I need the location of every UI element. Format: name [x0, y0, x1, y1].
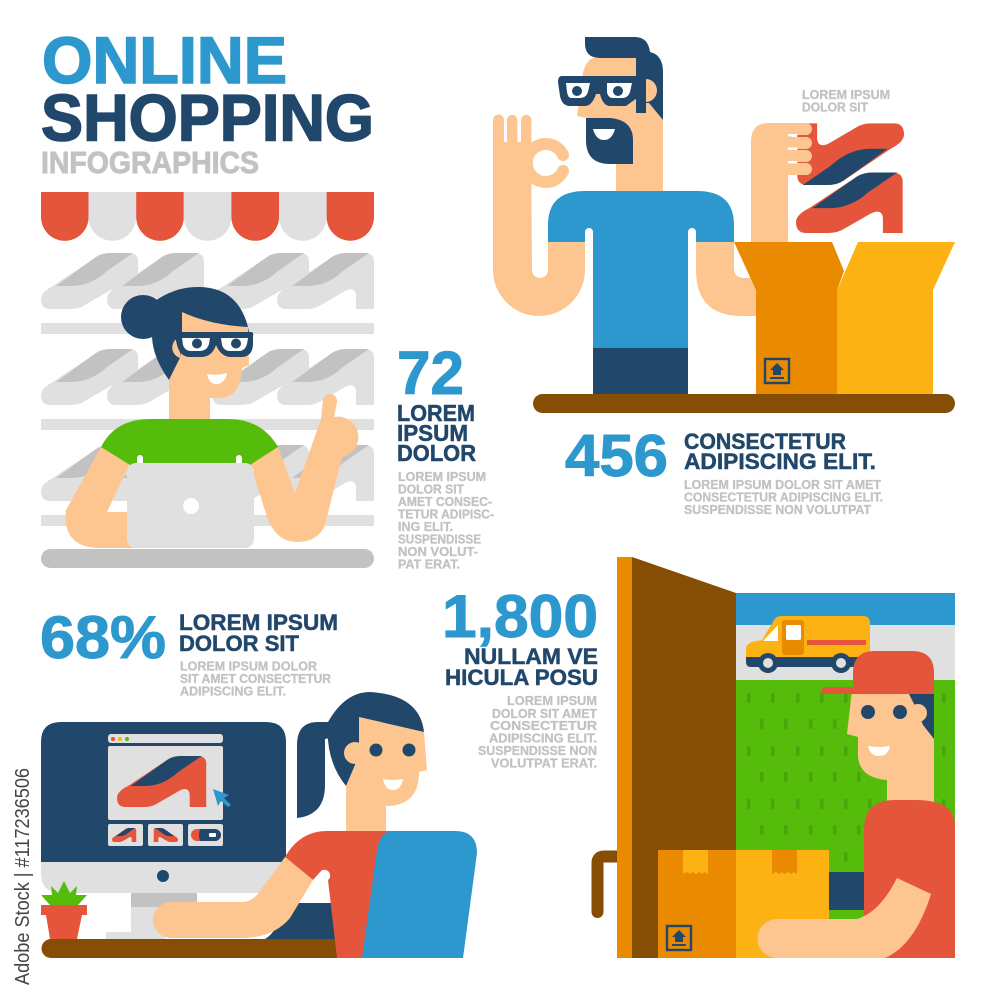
stat: 72: IPSUM — [397, 420, 468, 446]
stat: 1,800: NULLAM VE — [464, 644, 598, 669]
label: small caption — [802, 87, 890, 114]
courier neck and face — [847, 690, 934, 805]
stat: 68%: ADIPISCING ELIT. — [180, 684, 286, 698]
man mouth — [593, 129, 615, 140]
delivery truck — [746, 616, 870, 673]
woman neck and face — [346, 717, 427, 835]
title: INFOGRAPHICS — [41, 146, 259, 180]
stat: 456: 456 — [565, 423, 668, 489]
stat: 1,800: 1,800 — [442, 583, 598, 650]
shirt notches — [137, 455, 242, 469]
stat: 456: SUSPENDISSE NON VOLUTPAT — [684, 502, 871, 517]
shelves with shoes — [41, 253, 374, 526]
raised arm holding shoe — [751, 123, 812, 242]
stat: 1,800: HICULA POSU — [445, 665, 598, 690]
trousers — [593, 348, 688, 394]
courier eyes — [861, 705, 907, 719]
stat: 72: 72 — [397, 339, 464, 407]
icon: this way up — [765, 359, 789, 383]
man head and neck — [577, 58, 663, 195]
stat: 72: PAT ERAT. — [398, 556, 460, 572]
browser window — [108, 734, 223, 846]
red top — [285, 831, 395, 958]
stat: 68% — [40, 604, 338, 698]
stat: 1,800: DOLOR SIT AMET — [492, 706, 597, 721]
cardboard box — [734, 242, 955, 394]
monitor — [41, 722, 286, 893]
woman smile — [383, 779, 403, 790]
man ear — [646, 79, 657, 102]
stat: 68%: 68% — [40, 604, 166, 671]
woman hair — [328, 692, 424, 786]
woman eyes — [370, 744, 416, 756]
stat: 68%: LOREM IPSUM — [179, 610, 338, 635]
panel: delivery at door — [598, 557, 955, 958]
stat: 1,800: CONSECTETUR — [490, 718, 598, 733]
red cap — [822, 651, 934, 694]
stat: 456: ADIPISCING ELIT. — [684, 449, 876, 474]
awning — [41, 192, 374, 241]
title — [41, 23, 374, 180]
title: SHOPPING — [41, 80, 374, 154]
finger gaps — [788, 134, 797, 164]
stat: 72 — [397, 339, 494, 572]
arms — [66, 394, 358, 548]
label: small caption: DOLOR SIT — [802, 100, 868, 114]
stat: 1,800: SUSPENDISSE NON — [478, 743, 597, 758]
stat: 456 — [565, 423, 883, 517]
panel: woman at computer — [41, 692, 477, 958]
woman arm — [153, 857, 313, 938]
label: small caption: LOREM IPSUM — [802, 87, 890, 102]
door frame — [617, 557, 632, 958]
title: ONLINE — [42, 23, 287, 97]
door handle — [598, 856, 617, 912]
man table — [533, 394, 955, 413]
cursor — [213, 789, 231, 807]
stat: 1,800: ADIPISCING ELIT. — [489, 730, 597, 746]
stat: 72: TETUR ADIPISC- — [398, 506, 494, 522]
man hair — [585, 37, 663, 120]
stat: 1,800: VOLUTPAT ERAT. — [491, 756, 597, 770]
stock image id: Adobe Stock | #117236506 — [12, 768, 34, 985]
chair back — [265, 903, 340, 939]
stat: 456: CONSECTETUR ADIPISCING ELIT. — [684, 490, 883, 504]
desk — [42, 939, 337, 958]
stat: 72: LOREM IPSUM — [398, 469, 486, 484]
stat: 72: NON VOLUT- — [398, 544, 478, 559]
stat: 72: SUSPENDISSE — [398, 532, 481, 546]
red shoes — [796, 123, 904, 233]
grass marks — [747, 693, 946, 862]
laptop — [127, 463, 254, 548]
plant — [41, 881, 87, 939]
stat: 72: AMET CONSEC- — [398, 494, 492, 509]
green shirt — [101, 419, 278, 465]
man glasses — [558, 76, 637, 106]
stat: 72: DOLOR — [397, 440, 476, 466]
blue cardigan — [362, 831, 477, 958]
shelf counter — [41, 549, 374, 568]
woman ear — [344, 742, 366, 764]
panel: shop assistant — [41, 192, 374, 568]
courier hair — [909, 694, 934, 739]
stat: 68%: SIT AMET CONSECTETUR — [180, 671, 332, 686]
courier arm — [758, 878, 931, 958]
man beard — [586, 118, 633, 164]
man arms — [493, 114, 765, 316]
stat: 68%: LOREM IPSUM DOLOR — [180, 658, 318, 674]
monitor stand — [106, 893, 197, 939]
stat: 72: DOLOR SIT — [398, 482, 464, 496]
stat: 1,800: LOREM IPSUM — [507, 693, 597, 708]
stat: 456: CONSECTETUR — [684, 429, 846, 454]
woman with bun and glasses — [121, 287, 253, 425]
open door — [632, 557, 736, 958]
panel: bearded man with box — [493, 37, 955, 413]
stat: 72: ING ELIT. — [398, 519, 453, 534]
blue t-shirt — [548, 191, 734, 348]
navy trousers — [829, 872, 869, 910]
courier red shirt — [864, 800, 955, 958]
outdoor scene — [736, 593, 955, 958]
OK hand ring — [527, 144, 563, 182]
parcel — [658, 850, 829, 958]
stat: 68%: DOLOR SIT — [179, 631, 299, 656]
stat: 1,800 — [442, 583, 598, 770]
stat: 72: LOREM — [397, 400, 475, 426]
courier ear — [909, 704, 927, 722]
woman ponytail — [297, 722, 330, 818]
courier smile — [868, 746, 890, 756]
stat: 456: LOREM IPSUM DOLOR SIT AMET — [684, 477, 881, 492]
